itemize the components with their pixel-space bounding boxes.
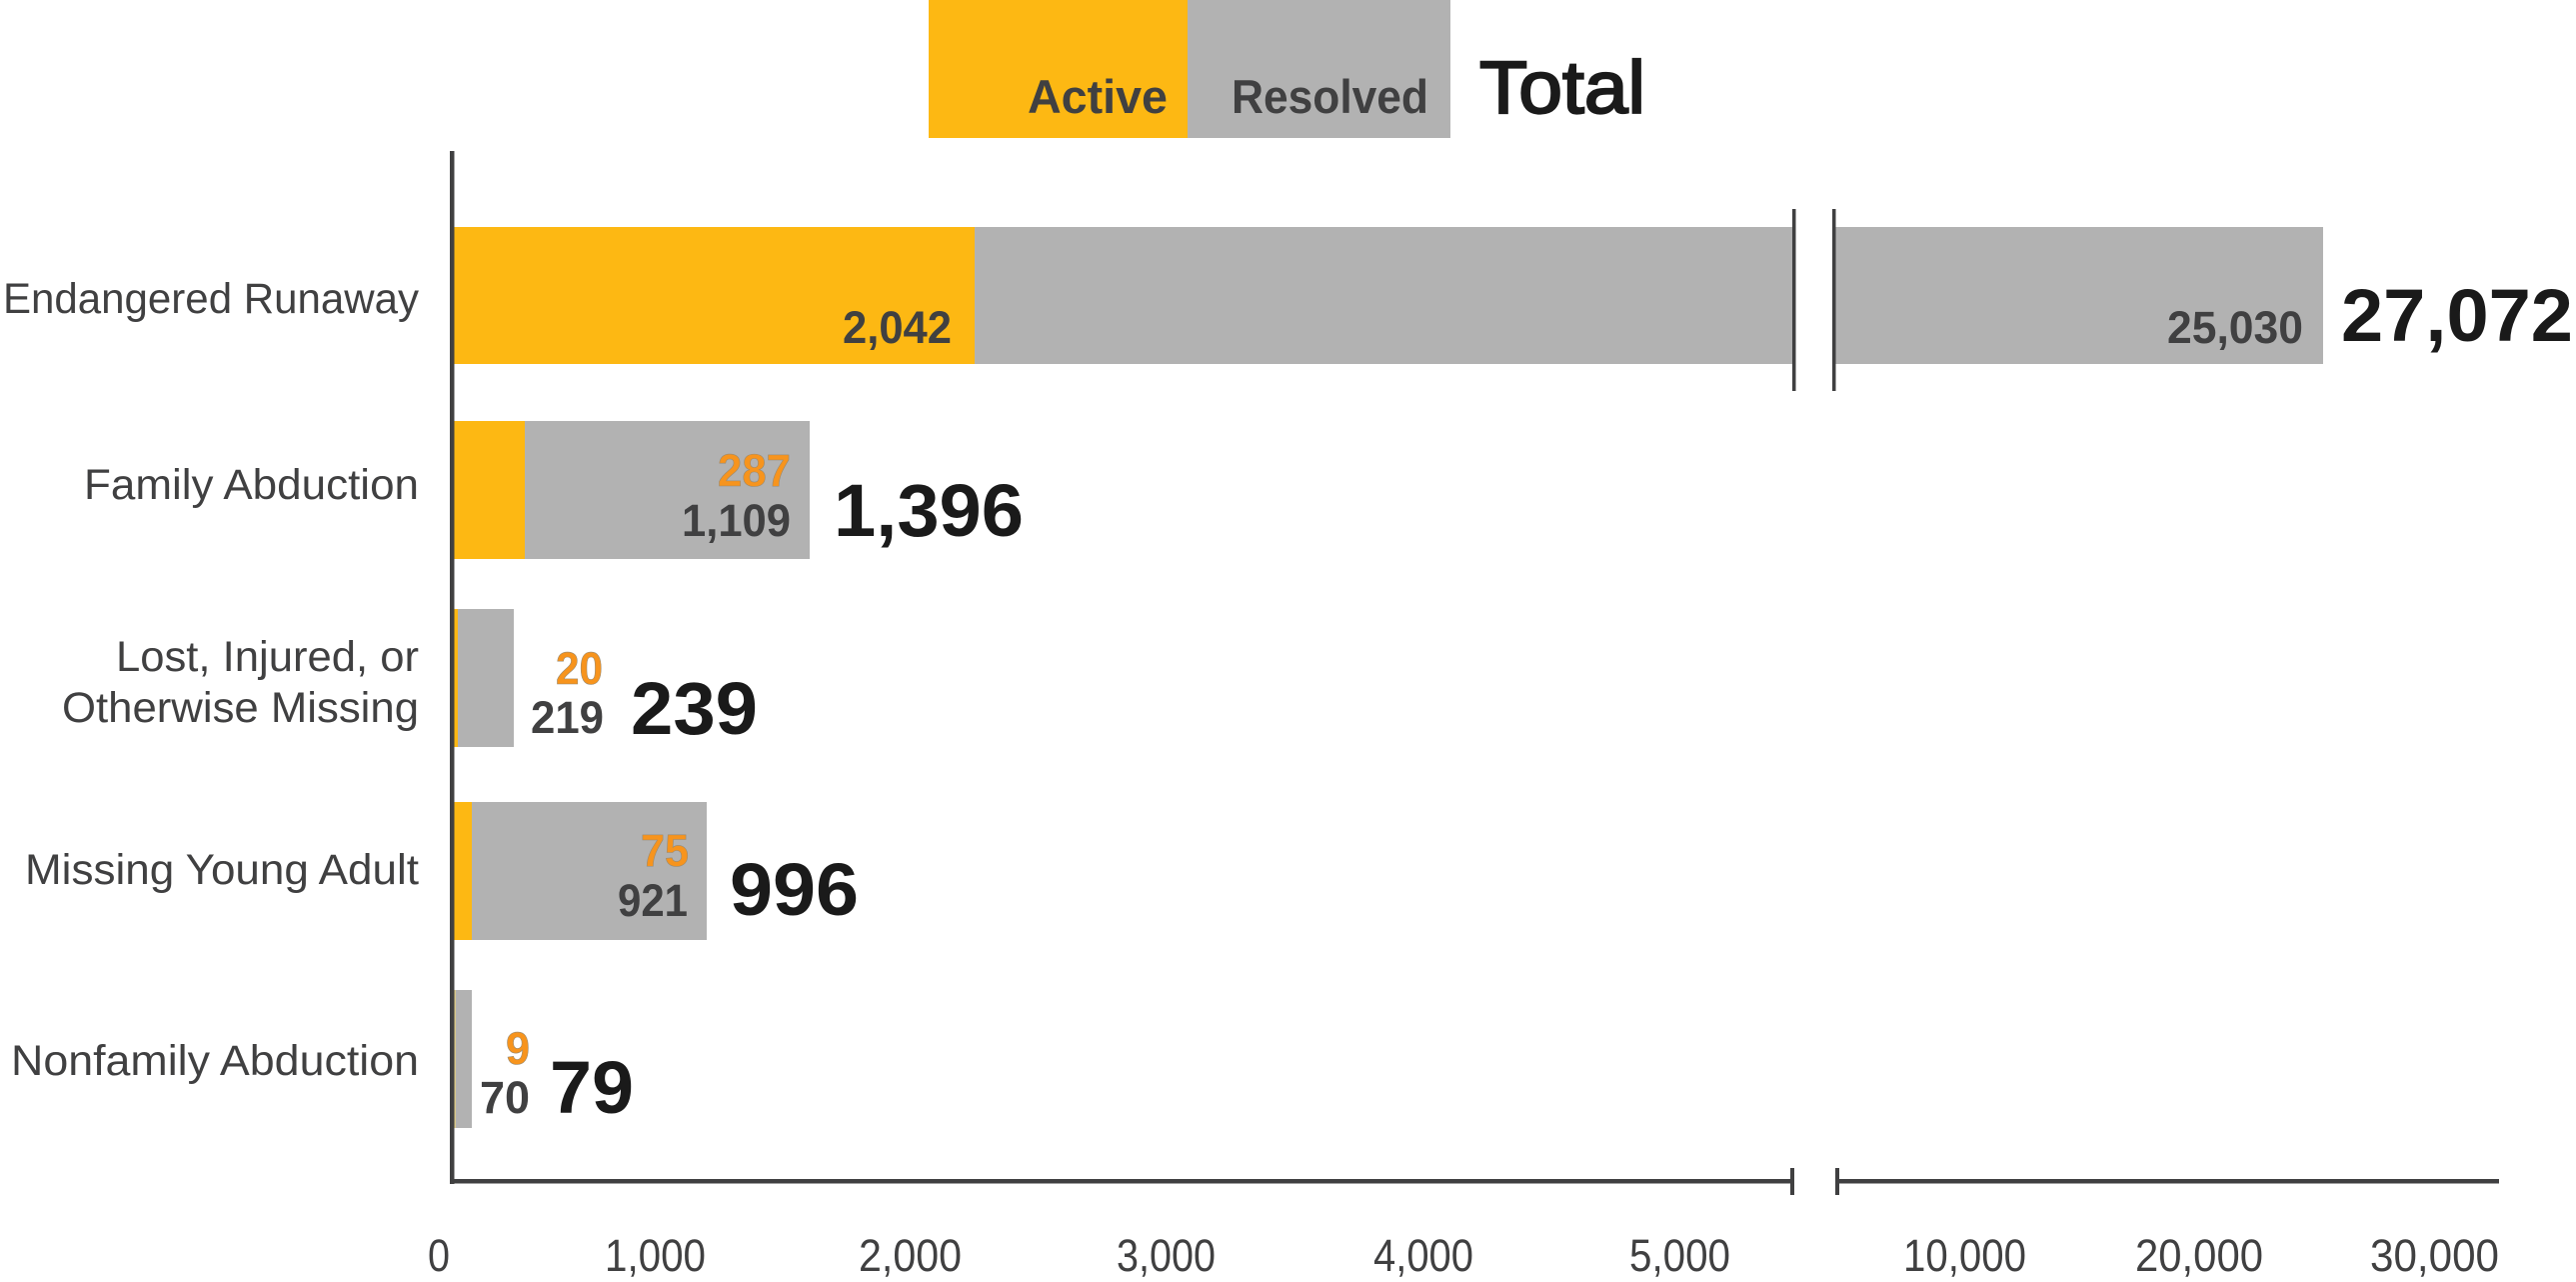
resolved value: 70 [480,1072,530,1123]
active value: 2,042 [843,302,952,353]
resolved bar [472,802,707,940]
tick label 0: 0 [428,1230,450,1281]
resolved bar [975,227,2323,364]
resolved bar [456,990,472,1128]
total value: 27,072 [2341,274,2573,357]
active bar [454,227,975,364]
legend label: resolved: Resolved [1232,70,1428,123]
chart axes [450,151,2499,1195]
tick label 20,000: 20,000 [2135,1230,2263,1281]
category label: Lost, Injured, or [116,633,419,681]
legend [929,0,1645,138]
active value: 287 [718,445,791,496]
active bar [454,990,456,1128]
resolved bar [525,421,810,559]
tick label 2,000: 2,000 [859,1230,962,1281]
tick label 5,000: 5,000 [1629,1230,1730,1281]
horizontal axis, right segment [1837,1179,2499,1184]
total value: 239 [631,667,758,750]
tick label 10,000: 10,000 [1903,1230,2026,1281]
tick label 3,000: 3,000 [1117,1230,1216,1281]
axis break in bar [1792,205,1835,395]
active value: 9 [506,1023,530,1074]
category label: Nonfamily Abduction [11,1037,419,1085]
resolved value: 921 [618,875,688,926]
resolved value: 25,030 [2167,302,2303,353]
total value: 79 [550,1046,634,1129]
row: Lost, Injured, or Otherwise Missing [62,609,758,750]
legend label: total: Total [1479,46,1645,129]
legend swatch: active [929,0,1188,138]
row: Endangered Runaway [3,205,2573,395]
legend label: active: Active [1028,70,1168,123]
active value: 20 [556,643,603,694]
category label: Missing Young Adult [25,846,419,894]
total value: 996 [730,848,859,931]
active bar [454,802,472,940]
axis break tick left [1790,1168,1794,1195]
axis break tick right [1835,1168,1839,1195]
resolved value: 1,109 [682,495,791,546]
legend swatch: resolved [1188,0,1450,138]
total value: 1,396 [834,469,1024,552]
category label: Family Abduction [84,461,419,509]
active value: 75 [641,825,689,876]
category label: Endangered Runaway [3,275,419,323]
row: Missing Young Adult [25,802,859,940]
vertical axis [450,151,454,1184]
row: Family Abduction [84,421,1024,559]
x axis labels [428,1230,2499,1281]
active bar [454,609,458,747]
resolved value: 219 [531,692,604,743]
row: Nonfamily Abduction [11,990,634,1129]
category label: Otherwise Missing [62,684,419,732]
resolved bar [458,609,514,747]
tick label 30,000: 30,000 [2370,1230,2499,1281]
horizontal axis, left segment [450,1179,1793,1184]
tick label 1,000: 1,000 [605,1230,706,1281]
tick label 4,000: 4,000 [1373,1230,1473,1281]
active bar [454,421,525,559]
